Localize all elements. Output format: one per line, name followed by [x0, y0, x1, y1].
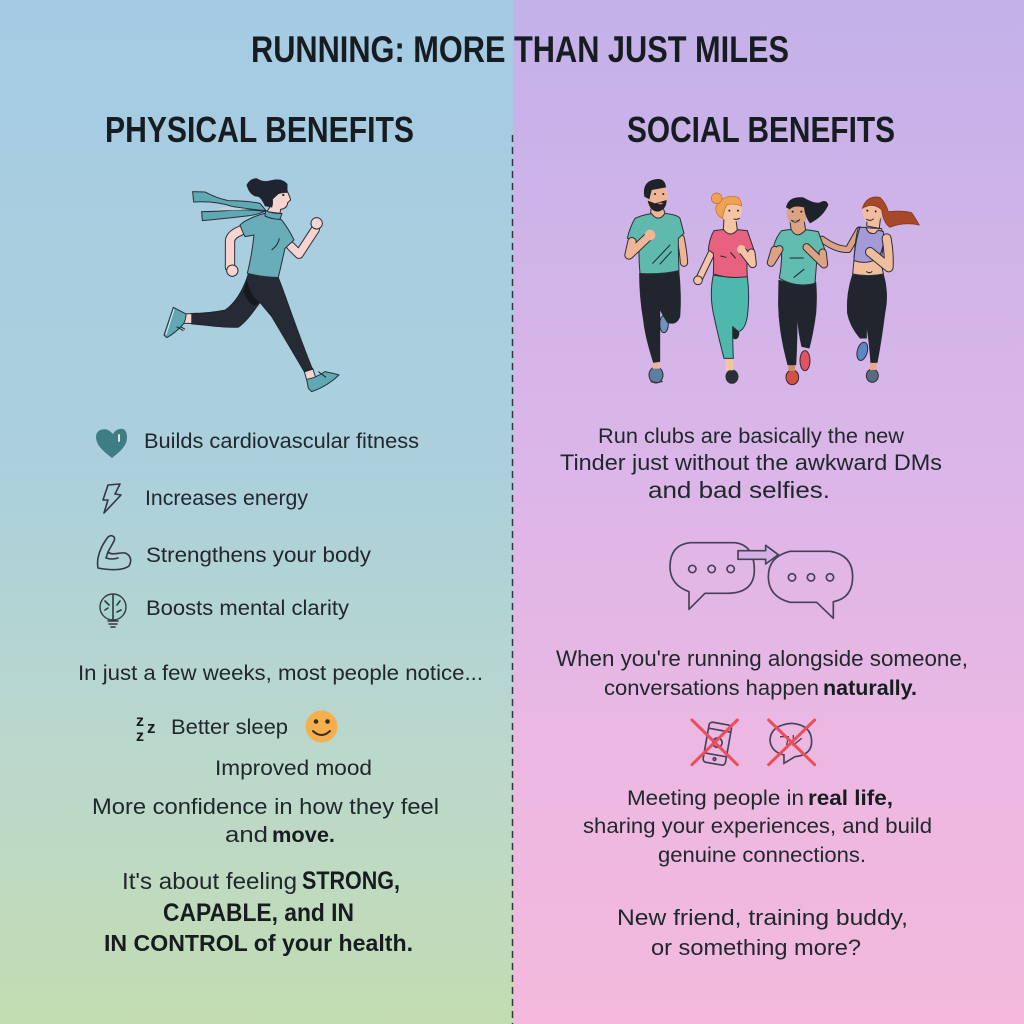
text: conversations happen naturally: When you're running alongside someone,	[556, 646, 968, 671]
icon: lightning bolt	[103, 484, 121, 513]
text: more confidence	[92, 794, 439, 847]
text: meeting people in real life	[583, 787, 932, 867]
illustration: group of four runners	[627, 179, 919, 385]
text: meeting people in real life: sharing your experiences, and build	[583, 815, 932, 838]
text: meeting people in real life: genuine connections.	[658, 844, 866, 867]
icon: chat bubbles with arrow	[670, 543, 853, 618]
list item: mental clarity: Boosts mental clarity	[146, 597, 350, 620]
text: run clubs: Run clubs are basically the new	[598, 425, 905, 448]
runner: woman in teal top	[771, 197, 859, 385]
icon: sleep zzz	[136, 713, 156, 745]
runner: woman in pink top	[694, 193, 754, 383]
runner: woman in purple bra top	[847, 197, 919, 382]
runner: bearded man	[627, 179, 684, 383]
text: more confidence: More confidence in how they feel	[92, 794, 439, 819]
title: RUNNING: MORE THAN JUST MILES	[251, 29, 789, 70]
list item: strength: Strengthens your body	[146, 544, 372, 567]
list item: cardiovascular fitness: Builds cardiovascular fitness	[144, 430, 419, 453]
list item: cardiovascular fitness	[96, 429, 419, 458]
text: more confidence: and	[225, 822, 268, 847]
icon: flexed arm	[98, 536, 131, 570]
illustration: solo runner with scarf	[164, 178, 339, 392]
icon: heart	[96, 429, 127, 458]
callout: strong, capable, in control: STRONG,	[302, 867, 400, 895]
text: conversations happen naturally: naturally.	[823, 677, 917, 700]
list item: strength	[98, 536, 372, 570]
list item: mental clarity	[100, 594, 350, 627]
text: in just a few weeks: In just a few weeks, most people notice...	[78, 662, 483, 685]
icon: smiley	[306, 710, 338, 742]
text: conversations happen naturally: conversations happen	[604, 677, 819, 700]
text: run clubs: and bad selfies.	[648, 477, 830, 503]
icon: crossed-out chat bubble	[769, 720, 815, 765]
icon: sleep zzz: z	[136, 713, 144, 730]
text: new friend question	[617, 905, 908, 960]
callout: strong, capable, in control: It's about feeling	[122, 868, 297, 894]
icon: sleep zzz: z	[136, 728, 144, 745]
text: conversations happen naturally	[556, 646, 968, 700]
callout: strong, capable, in control	[104, 867, 413, 956]
text: run clubs	[560, 425, 942, 503]
icon: brain bulb	[100, 594, 126, 627]
text: run clubs: Tinder just without the awkward DMs	[560, 450, 942, 475]
text: better sleep: Better sleep	[171, 716, 288, 739]
text: new friend question: or something more?	[651, 935, 861, 960]
list item: energy	[103, 484, 309, 513]
panel: physical benefits background	[0, 0, 513, 1024]
panel: social benefits background	[513, 0, 1024, 1024]
text: meeting people in real life: real life,	[808, 787, 893, 810]
heading: social benefits: SOCIAL BENEFITS	[627, 109, 895, 150]
text: more confidence: move.	[272, 824, 335, 847]
icon: crossed-out phone	[692, 720, 737, 766]
callout: strong, capable, in control: IN CONTROL of your health.	[104, 930, 413, 956]
list item: energy: Increases energy	[145, 487, 309, 510]
heading: physical benefits: PHYSICAL BENEFITS	[105, 109, 414, 150]
icon: sleep zzz: z	[147, 718, 156, 737]
text: improved mood: Improved mood	[215, 757, 372, 780]
text: new friend question: New friend, training buddy,	[617, 905, 908, 930]
callout: strong, capable, in control: CAPABLE, and IN	[163, 899, 354, 927]
text: meeting people in real life: Meeting people in	[627, 787, 804, 810]
